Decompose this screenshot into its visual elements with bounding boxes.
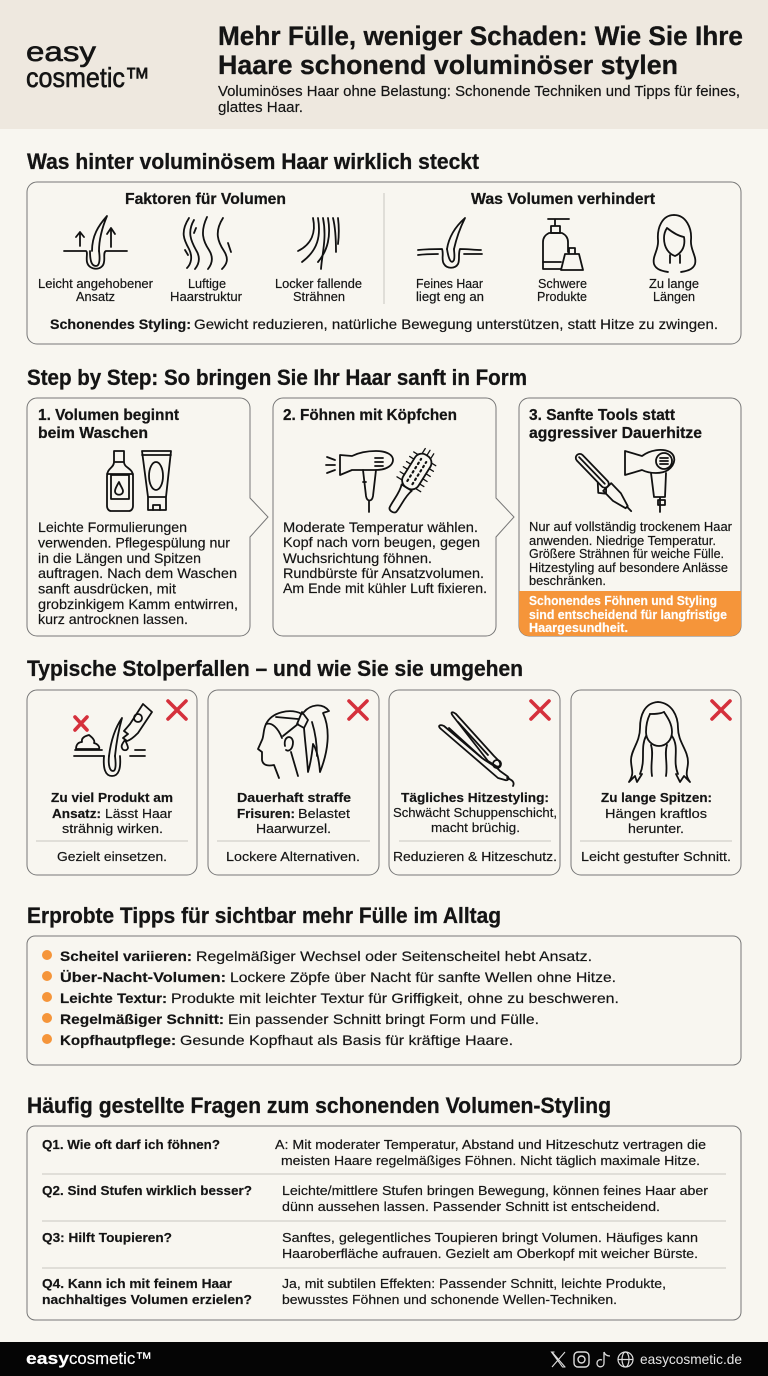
card solution: Gezielt einsetzen.	[57, 849, 167, 864]
icon: X	[552, 1352, 566, 1367]
summary line: Schonendes Styling:	[50, 316, 191, 332]
question 4	[42, 1276, 666, 1307]
step 3 text: Nur auf vollständig trockenem Haar	[529, 519, 733, 534]
step 2 text	[283, 519, 487, 596]
tip 5: Kopfhautpflege:	[60, 1032, 176, 1048]
step 1 text: verwenden. Pflegespülung nur	[38, 534, 230, 550]
question 3: Haaroberfläche aufrauen. Gezielt am Oberkopf mit weicher Bürste.	[282, 1246, 698, 1261]
icon: red cross	[349, 701, 367, 719]
question 4: nachhaltiges Volumen erzielen?	[42, 1292, 252, 1307]
card text: macht brüchig.	[431, 820, 520, 835]
step 1 text	[38, 519, 238, 627]
tip 3	[42, 990, 619, 1006]
icon: globe	[618, 1352, 633, 1367]
card text: Belastet	[298, 806, 350, 821]
panel: volume factors	[27, 182, 741, 344]
card text: Dauerhaft straffe	[237, 790, 351, 805]
icon: flat iron	[439, 712, 514, 786]
icon: long wavy hair	[629, 702, 690, 782]
step 2 text: Wuchsrichtung föhnen.	[283, 550, 432, 566]
title: Haare schonend voluminöser stylen	[218, 50, 678, 80]
tip 4	[42, 1011, 539, 1027]
step 1 title: beim Waschen	[38, 425, 148, 442]
question 2: Leichte/mittlere Stufen bringen Bewegung, können feines Haar aber	[282, 1183, 709, 1198]
card text: Hängen kraftlos	[605, 806, 708, 821]
header band	[0, 0, 768, 129]
label: lifted root	[38, 277, 153, 304]
step 2 text: Am Ende mit kühler Luft fixieren.	[283, 580, 487, 596]
step 2 text: Moderate Temperatur wählen.	[283, 519, 478, 535]
card text	[51, 790, 173, 836]
summary line: Gewicht reduzieren, natürliche Bewegung unterstützen, statt Hitze zu zwingen.	[194, 316, 718, 332]
icon: curling iron and dryer	[569, 450, 674, 519]
tip 1	[42, 948, 592, 964]
card solution: Reduzieren & Hitzeschutz.	[393, 849, 557, 864]
card text	[237, 790, 351, 836]
card text: Lässt Haar	[105, 806, 173, 821]
card text	[601, 790, 712, 836]
question 1: meisten Haare regelmäßiges Föhnen. Nicht täglich maximale Hitze.	[281, 1153, 700, 1168]
tip 4: Regelmäßiger Schnitt:	[60, 1011, 224, 1027]
card text: herunter.	[628, 821, 684, 836]
card text: Schwächt Schuppenschicht,	[393, 805, 557, 820]
card text: Haarwurzel.	[256, 821, 331, 836]
card text: Frisuren:	[237, 806, 295, 821]
tip 3: Produkte mit leichter Textur für Griffigkeit, ohne zu beschweren.	[171, 990, 619, 1006]
callout: orange note	[519, 591, 741, 636]
tip 4: Ein passender Schnitt bringt Form und Fülle.	[228, 1011, 539, 1027]
question 3: Sanftes, gelegentliches Toupieren bringt Volumen. Häufiges kann	[282, 1230, 698, 1245]
step 1 text: in die Längen und Spitzen	[38, 550, 201, 566]
label: too long hair: Längen	[653, 290, 695, 304]
label: lifted root: Leicht angehobener	[38, 277, 153, 291]
step 1 text: grobzinkigem Kamm entwirren,	[38, 596, 238, 612]
icon: red cross	[712, 701, 730, 719]
panel: step 3	[519, 398, 741, 636]
card solution: Leicht gestufter Schnitt.	[581, 849, 731, 864]
question 4: bewusstes Föhnen und schonende Wellen-Techniken.	[282, 1292, 617, 1307]
tip 2: Lockere Zöpfe über Nacht für sanfte Wellen ohne Hitze.	[230, 969, 616, 985]
heading: section 3: Typische Stolperfallen – und wie Sie sie umgehen	[27, 656, 523, 681]
card text: strähnig wirken.	[62, 821, 163, 836]
footer website: easycosmetic.de	[640, 1351, 742, 1367]
panel: tips	[27, 936, 741, 1065]
heading: section 5: Häufig gestellte Fragen zum schonenden Volumen-Styling	[27, 1093, 611, 1118]
label: fine flat hair: liegt eng an	[416, 290, 484, 304]
callout: orange note: sind entscheidend für langfristige	[529, 607, 727, 622]
label: heavy products: Schwere	[538, 277, 587, 291]
card text: Zu lange Spitzen:	[601, 790, 712, 805]
question 2: dünn aussehen lassen. Passender Schnitt ist entscheidend.	[282, 1199, 660, 1214]
logo	[26, 36, 150, 93]
icon: ponytail head	[258, 705, 329, 778]
step 3 text: Größere Strähnen für weiche Fülle.	[529, 546, 724, 561]
icon: too long hair	[654, 215, 695, 272]
card: tight hairstyles	[208, 690, 379, 875]
label: loose strands: Strähnen	[293, 290, 345, 304]
label: airy hair structure	[170, 277, 242, 304]
label: loose strands: Locker fallende	[275, 277, 362, 291]
icon: lifted root	[64, 216, 127, 269]
card: daily heat styling	[389, 690, 560, 875]
logo: cosmetic™	[26, 62, 150, 93]
icon: loose strands	[298, 218, 339, 269]
tip 2	[42, 969, 616, 985]
step 2 text: Rundbürste für Ansatzvolumen.	[283, 565, 484, 581]
question 1	[42, 1137, 706, 1168]
panel: step 1	[27, 398, 268, 636]
footer logo: easy	[26, 1349, 70, 1368]
card text: Ansatz:	[52, 806, 101, 821]
title	[218, 21, 743, 80]
step 3 title: aggressiver Dauerhitze	[529, 425, 702, 442]
step 2 title: 2. Föhnen mit Köpfchen	[283, 407, 457, 424]
label: heavy products: Produkte	[537, 290, 587, 304]
label: lifted root: Ansatz	[76, 290, 115, 304]
icon: red cross	[531, 701, 549, 719]
step 1 title	[38, 407, 180, 442]
step 1 text: Leichte Formulierungen	[38, 519, 187, 535]
step 3 title: 3. Sanfte Tools statt	[529, 407, 676, 424]
label: fine flat hair: Feines Haar	[416, 277, 483, 291]
question 1: Q1. Wie oft darf ich föhnen?	[42, 1137, 220, 1152]
callout: orange note: Haargesundheit.	[529, 620, 628, 635]
question 1: A: Mit moderater Temperatur, Abstand und Hitzeschutz vertragen die	[275, 1137, 706, 1152]
icon: bottle and tube	[107, 451, 171, 511]
tip 5	[42, 1032, 513, 1048]
icon: heavy products	[543, 219, 583, 270]
subtitle: Voluminöses Haar ohne Belastung: Schonende Techniken und Tipps für feines,	[218, 83, 740, 100]
label: heavy products	[537, 277, 587, 304]
step 3 text: beschränken.	[529, 573, 606, 588]
question 2: Q2. Sind Stufen wirklich besser?	[42, 1183, 252, 1198]
card solution: Lockere Alternativen.	[226, 849, 360, 864]
step 3 text	[529, 519, 733, 588]
card text	[393, 790, 557, 835]
callout: orange note: Schonendes Föhnen und Styling	[529, 593, 717, 608]
step 1 text: kurz antrocknen lassen.	[38, 611, 188, 627]
icon: fine flat hair	[418, 218, 482, 268]
card text: Tägliches Hitzestyling:	[401, 790, 549, 805]
label: loose strands	[275, 277, 362, 304]
icon: Instagram	[574, 1352, 589, 1367]
question 4: Q4. Kann ich mit feinem Haar	[42, 1276, 232, 1291]
step 3 title	[529, 407, 702, 442]
tip 1: Scheitel variieren:	[60, 948, 192, 964]
tip 1: Regelmäßiger Wechsel oder Seitenscheitel hebt Ansatz.	[196, 948, 592, 964]
subheading: factors: Faktoren für Volumen	[125, 191, 286, 208]
question 3	[42, 1230, 698, 1261]
footer	[0, 1342, 768, 1376]
title: Mehr Fülle, weniger Schaden: Wie Sie Ihre	[218, 21, 743, 51]
tip 3: Leichte Textur:	[60, 990, 167, 1006]
step 1 title: 1. Volumen beginnt	[38, 407, 180, 424]
logo: easy	[26, 36, 96, 67]
step 3 text: anwenden. Niedrige Temperatur.	[529, 533, 716, 548]
step 1 text: auftragen. Nach dem Waschen	[38, 565, 237, 581]
icon: hair dryer and round brush	[326, 443, 442, 519]
panel: step 2	[273, 398, 514, 636]
subheading: obstacles: Was Volumen verhindert	[471, 191, 656, 208]
label: airy hair structure: Luftige	[188, 277, 226, 291]
question 3: Q3: Hilft Toupieren?	[42, 1230, 172, 1245]
heading: section 2: Step by Step: So bringen Sie Ihr Haar sanft in Form	[27, 365, 527, 390]
brush	[380, 443, 442, 519]
heading: section 1: Was hinter voluminösem Haar wirklich steckt	[27, 149, 480, 174]
label: too long hair: Zu lange	[649, 277, 699, 291]
step 3 text: Hitzestyling auf besondere Anlässe	[529, 560, 728, 575]
card: long ends	[571, 690, 741, 875]
icon: airy hair structure	[184, 217, 231, 269]
tip 5: Gesunde Kopfhaut als Basis für kräftige Haare.	[180, 1032, 513, 1048]
heading: section 4: Erprobte Tipps für sichtbar mehr Fülle im Alltag	[27, 903, 501, 928]
footer logo: cosmetic™	[69, 1349, 152, 1368]
icon: product on root	[74, 704, 152, 776]
subtitle	[218, 83, 740, 116]
step 2 text: Kopf nach vorn beugen, gegen	[283, 534, 480, 550]
tip 2: Über-Nacht-Volumen:	[60, 969, 226, 985]
card text: Zu viel Produkt am	[51, 790, 173, 805]
question 2	[42, 1183, 709, 1214]
icon: TikTok	[597, 1352, 610, 1367]
step 1 text: sanft ausdrücken, mit	[38, 580, 176, 596]
icon: red cross	[168, 701, 186, 719]
label: airy hair structure: Haarstruktur	[170, 290, 242, 304]
question 4: Ja, mit subtilen Effekten: Passender Schnitt, leichte Produkte,	[282, 1276, 666, 1291]
panel: FAQ	[27, 1126, 741, 1320]
subtitle: glattes Haar.	[218, 99, 303, 116]
label: fine flat hair	[416, 277, 484, 304]
footer logo	[26, 1349, 152, 1368]
card: too much product	[27, 690, 197, 875]
label: too long hair	[649, 277, 699, 304]
